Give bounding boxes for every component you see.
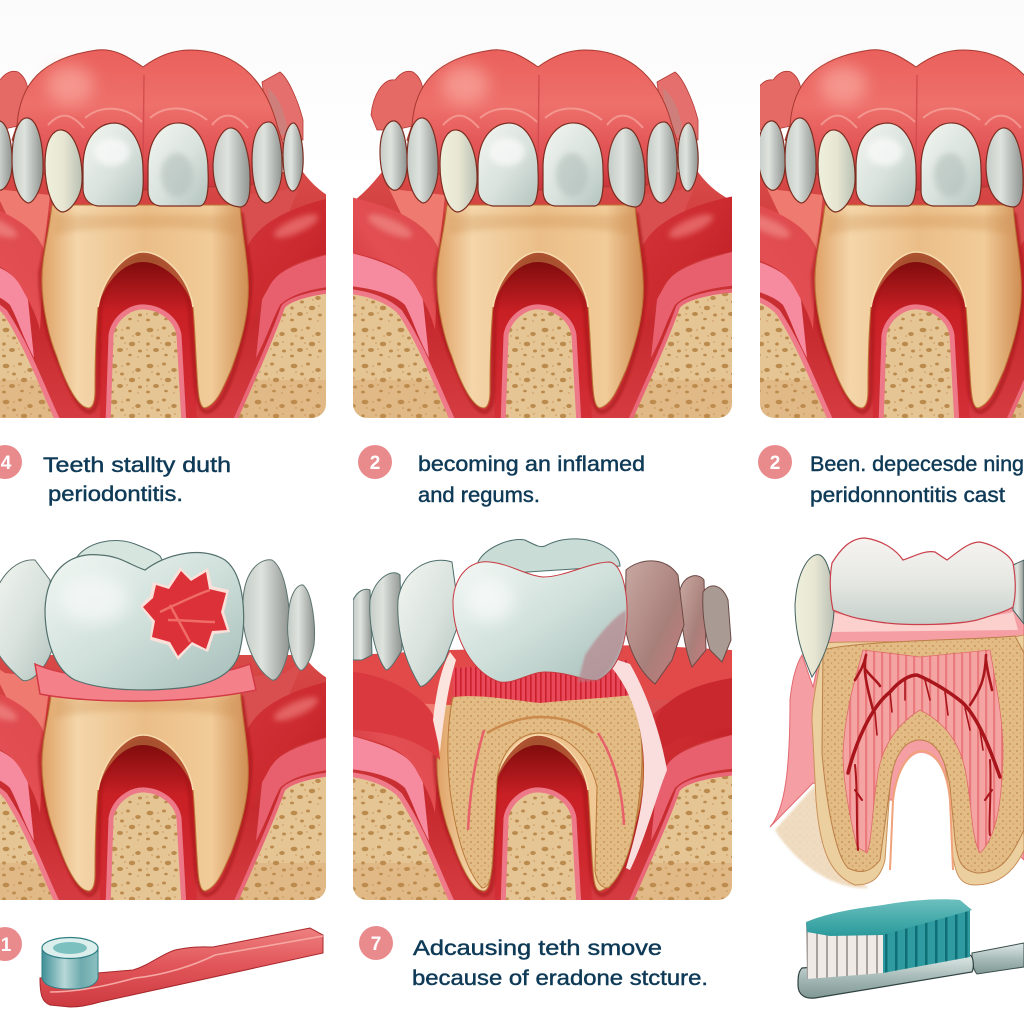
step badge 4 [0,445,22,479]
back cusp of molar [76,540,162,570]
pulp chamber [843,650,1003,853]
left side tooth [795,555,834,677]
molar root, gums and bone [353,700,732,900]
upper gum and front teeth [371,50,698,212]
caption: stage 2: becoming an inflamed [418,453,645,476]
molar root, gums and bone [353,172,732,418]
arch line inside root [487,717,593,733]
caption: stage 3 [810,453,1024,507]
white right streak [612,660,667,870]
faded bone at lower left [775,785,868,888]
molar root, gums and bone [760,172,1024,418]
upper gum and front teeth [0,50,303,212]
step badge 4: 4 [1,453,12,474]
caption: stage 1: periodontitis. [48,483,183,506]
cutaway root [448,693,642,888]
step badge 2 (third panel): 2 [770,453,780,474]
handle [972,943,1024,974]
back cusps of molar [478,539,620,575]
step badge 7 [359,926,393,960]
step badge 7: 7 [371,934,381,955]
red gum area behind molar [353,645,732,705]
caption: stage 3: Been. depecesde ning [810,453,1024,476]
toothbrush: white and teal bristles [798,899,1024,998]
teal bristles [883,910,970,973]
stain on molar [578,610,626,682]
panel: stage 1 illustration [0,50,350,430]
caption: stage 2 [418,453,645,507]
toothbrush: red handle with round head [40,928,323,1007]
molar crown [830,538,1015,625]
step badge 1 [0,927,22,961]
step badge 2 [358,445,392,479]
gum collar [35,664,256,701]
panel: stage 5 illustration with exposed root [353,538,732,900]
crown lesion [140,567,230,660]
left roll of gum [353,672,440,760]
fibrous gum band under crown [453,660,633,703]
left side teeth [353,560,460,686]
pale inner gum [830,612,1018,632]
molar crown [45,553,244,690]
handle [40,928,323,1007]
right roll of gum [664,678,732,724]
caption: stage 3: peridonnontitis cast [810,484,1005,507]
bristle cylinder [42,948,98,989]
molar root, gums and bone [0,655,326,900]
caption: stage 5: because of eradone stcture. [412,967,708,990]
upper gum and front teeth [749,50,1024,212]
step badge 2 (third panel) [758,445,792,479]
caption: stage 5 [412,937,708,990]
panel: stage 4 illustration with crown lesion [0,541,350,913]
dentine layer [822,636,1024,873]
step badge 1: 1 [1,935,12,956]
side teeth [0,560,315,681]
caption: stage 1 [43,454,231,506]
outer tooth layer [812,635,1024,885]
step badge 2: 2 [370,453,380,474]
molar crown [453,562,627,682]
white left streak [433,652,456,752]
root opening [893,753,955,895]
molar root, gums and bone [0,172,326,418]
right side tooth sliver [1013,560,1024,624]
pink gum collar [770,608,1024,860]
brush head plate [798,955,973,998]
caption: stage 5: Adcausing teth smove [413,937,662,960]
caption: stage 1: Teeth stallty duth [43,454,231,477]
white bristles [806,923,883,979]
branching blood vessels [848,655,1000,850]
panel: stage 6 cross-section, faded on white [770,538,1024,895]
caption: stage 2: and regums. [418,484,540,507]
right side teeth [625,561,731,684]
panel: stage 2 illustration [353,49,732,418]
pulp line right [598,733,624,825]
bristle tops [806,899,972,936]
pulp line left [468,730,484,830]
panel: stage 3 illustration [760,49,1024,418]
